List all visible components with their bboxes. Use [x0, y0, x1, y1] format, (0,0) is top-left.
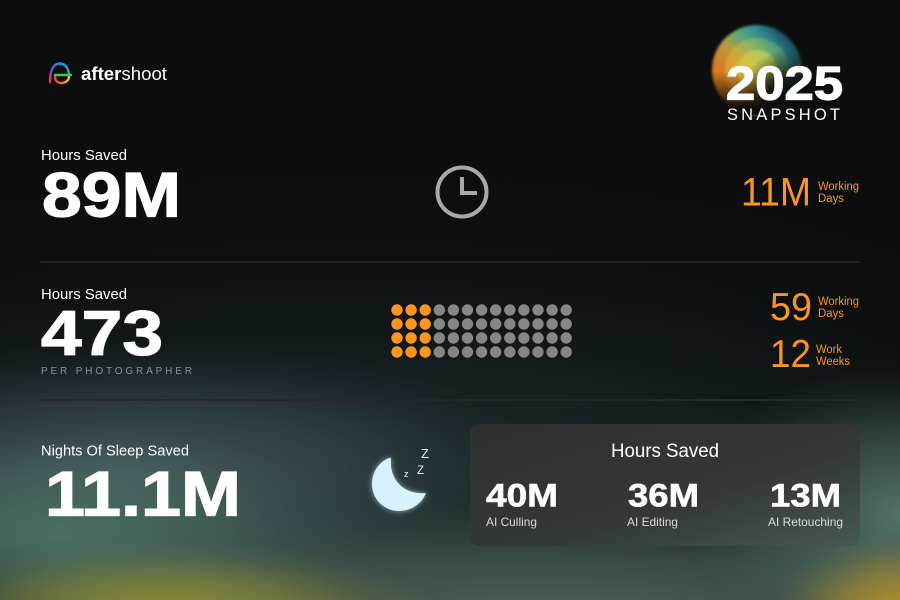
value: 11.1M	[45, 460, 241, 530]
stat: 59 working days: Working	[818, 296, 859, 308]
stat: AI culling	[486, 478, 558, 529]
stat: 59 working days: 59	[770, 286, 812, 329]
stat: 12 work weeks	[770, 333, 850, 376]
icon: aftershoot logo mark	[50, 64, 71, 83]
badge: 2025 snapshot	[700, 20, 843, 124]
icon: clock	[438, 168, 486, 216]
stat: 59 working days: Days	[818, 308, 844, 320]
year: 2025	[726, 56, 843, 110]
stat: 12 work weeks: Work	[816, 344, 842, 356]
stat: AI culling: 40M	[486, 478, 558, 514]
stat: working days	[741, 170, 859, 214]
stat: 59 working days	[770, 286, 859, 329]
label: Nights Of Sleep Saved	[41, 442, 189, 460]
stat: AI editing	[627, 478, 699, 529]
stat: 12 work weeks: 12	[770, 333, 811, 376]
caption: PER PHOTOGRAPHER	[41, 366, 192, 377]
stat: AI retouching: AI Retouching	[768, 515, 843, 529]
panel: hours saved breakdown	[470, 424, 860, 546]
row 2: hours saved per photographer	[41, 286, 859, 377]
icon: rainbow concentric circle	[700, 20, 820, 115]
wordmark: aftershoot	[81, 64, 167, 84]
stat: AI editing: 36M	[628, 478, 699, 514]
stat: AI culling: AI Culling	[486, 515, 537, 529]
label: Hours Saved	[41, 147, 127, 164]
value: 473	[41, 299, 163, 369]
value: 89M	[42, 160, 181, 230]
logo: aftershoot	[50, 64, 167, 84]
stat: working days: Working	[818, 181, 859, 193]
stat: AI retouching	[768, 478, 843, 529]
icon: moon with z's: Z	[417, 465, 424, 477]
label: Hours Saved	[41, 286, 127, 303]
icon: moon with z's	[372, 446, 429, 511]
row 1: hours saved	[41, 147, 859, 230]
dot matrix chart	[391, 304, 572, 358]
stat: working days: 11M	[741, 170, 811, 214]
stat: 12 work weeks: Weeks	[816, 356, 850, 368]
panel heading: Hours Saved	[611, 441, 719, 462]
stat: working days: Days	[818, 193, 844, 205]
subtitle: SNAPSHOT	[727, 106, 840, 124]
icon: moon with z's: Z	[421, 446, 429, 461]
row 3: nights of sleep saved	[41, 442, 429, 530]
stat: AI editing: AI Editing	[627, 515, 678, 529]
icon: moon with z's: z	[404, 469, 409, 479]
stat: AI retouching: 13M	[770, 478, 841, 514]
